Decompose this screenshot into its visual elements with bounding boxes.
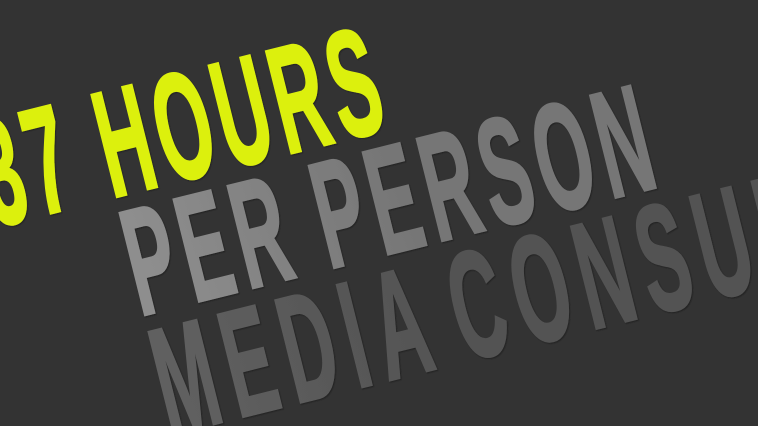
heading line: per person: PER PERSON — [107, 51, 676, 348]
